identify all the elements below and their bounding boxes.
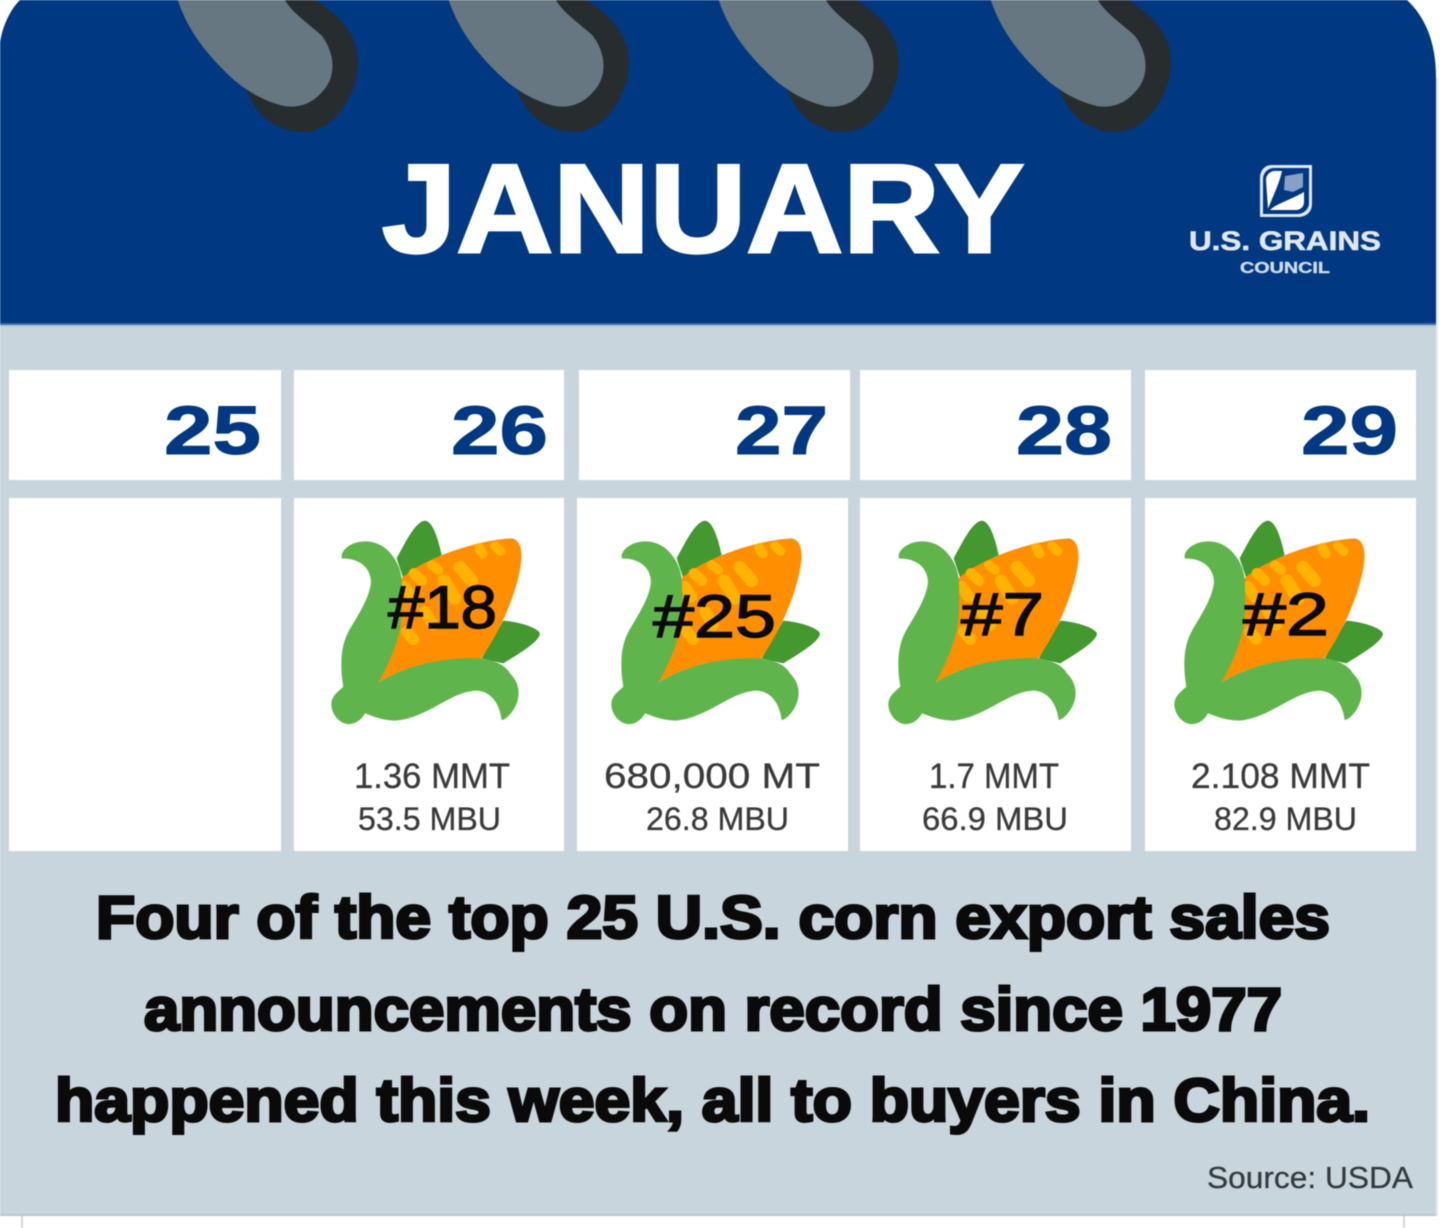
binder ring 2 xyxy=(448,0,629,132)
date cell 28 xyxy=(860,370,1131,480)
empty day cell 25 xyxy=(9,498,281,851)
rank: #2 xyxy=(1243,581,1329,648)
binder ring 3 xyxy=(718,0,899,132)
date cell 29 xyxy=(1145,370,1416,480)
day cell 26 xyxy=(294,498,564,851)
date cell 25: 25 xyxy=(164,392,261,469)
date cell 28: 28 xyxy=(1016,392,1112,469)
metric tons: 680,000 MT xyxy=(604,757,820,796)
date cell 26: 26 xyxy=(451,392,548,469)
panel: calendar body xyxy=(0,320,1436,1216)
date cell 25 xyxy=(9,370,281,480)
headline line 3: happened this week, all to buyers in China. xyxy=(55,1067,1370,1134)
headline text xyxy=(55,884,1370,1134)
day cell 29 xyxy=(1145,498,1416,851)
icon: corn xyxy=(1174,521,1383,724)
icon: corn xyxy=(611,521,820,724)
logo sub-wordmark: COUNCIL xyxy=(1240,260,1330,277)
icon: corn xyxy=(888,521,1097,724)
source note: Source: USDA xyxy=(1207,1160,1413,1195)
bushels: 66.9 MBU xyxy=(922,801,1068,837)
rank: #25 xyxy=(653,583,776,650)
logo: U.S. Grains Council xyxy=(1189,165,1381,277)
header bottom edge xyxy=(0,323,1436,327)
bushels: 53.5 MBU xyxy=(358,801,501,837)
day cell 28 xyxy=(860,498,1131,851)
date cell 26 xyxy=(294,370,564,480)
date cell 27: 27 xyxy=(735,392,828,469)
metric tons: 1.7 MMT xyxy=(929,757,1059,796)
metric tons: 2.108 MMT xyxy=(1191,757,1370,796)
headline line 1: Four of the top 25 U.S. corn export sales xyxy=(96,884,1330,951)
panel: blue calendar header xyxy=(0,0,1436,324)
binder ring 4 xyxy=(990,0,1171,132)
rank: #18 xyxy=(388,574,497,641)
icon: corn xyxy=(331,521,540,724)
bushels: 82.9 MBU xyxy=(1214,801,1357,837)
logo wordmark: U.S. GRAINS xyxy=(1189,226,1381,256)
rank: #7 xyxy=(961,581,1044,648)
headline line 2: announcements on record since 1977 xyxy=(144,976,1282,1043)
date cell 29: 29 xyxy=(1301,392,1398,469)
title: month: JANUARY xyxy=(382,138,1024,279)
date cell 27 xyxy=(579,370,850,480)
day cell 27 xyxy=(577,498,848,851)
binder ring 1 xyxy=(177,0,358,132)
icon: leaf emblem xyxy=(1260,165,1312,217)
bushels: 26.8 MBU xyxy=(646,801,789,837)
metric tons: 1.36 MMT xyxy=(354,757,510,796)
